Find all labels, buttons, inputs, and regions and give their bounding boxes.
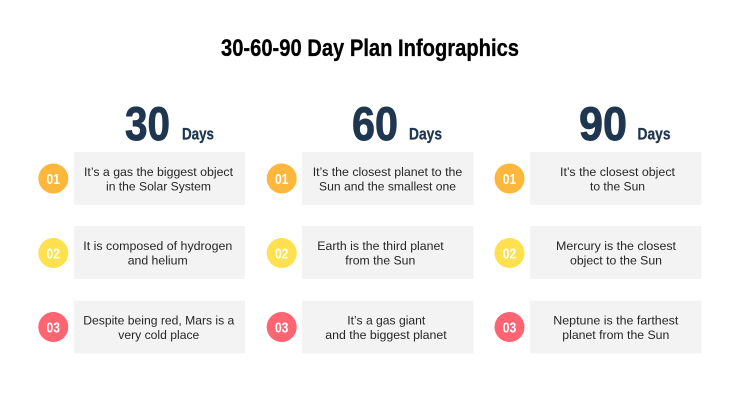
item 02: Earth is the third planet <box>317 239 444 253</box>
item 01 <box>267 152 474 205</box>
heading: 60 Days: Days <box>409 124 442 144</box>
item 02: object to the Sun <box>570 254 662 268</box>
heading: 60 Days: 60 <box>352 98 398 151</box>
item 01 <box>494 152 702 205</box>
heading: 30 Days <box>125 98 214 151</box>
item 03: 03 <box>47 320 60 336</box>
item 02: Mercury is the closest <box>556 239 677 253</box>
item 03: planet from the Sun <box>562 328 669 342</box>
column: 90 days <box>494 98 702 354</box>
column: 60 days <box>267 98 474 354</box>
item 02: 02 <box>503 246 516 262</box>
heading: 30 Days: 30 <box>125 98 170 151</box>
item 03: 03 <box>275 320 288 336</box>
item 02: and helium <box>128 254 188 268</box>
item 03: very cold place <box>118 328 199 342</box>
heading: 90 Days <box>579 98 670 151</box>
item 01: It’s the closest planet to the <box>313 165 462 179</box>
heading: 90 Days: 90 <box>579 98 627 151</box>
item 01: 01 <box>275 172 288 188</box>
item 02 <box>267 226 474 279</box>
item 03: 03 <box>503 320 516 336</box>
item 01: It’s a gas the biggest object <box>84 165 234 179</box>
item 01: Sun and the smallest one <box>319 180 456 194</box>
item 01: It’s the closest object <box>560 165 676 179</box>
item 02: It is composed of hydrogen <box>83 239 232 253</box>
item 01: 01 <box>47 172 60 188</box>
item 02 <box>38 226 245 279</box>
item 02: 02 <box>47 246 60 262</box>
item 03: Despite being red, Mars is a <box>83 314 234 328</box>
item 03: It’s a gas giant <box>347 314 426 328</box>
item 03: and the biggest planet <box>325 328 447 342</box>
title: 30-60-90 Day Plan Infographics <box>221 35 519 62</box>
heading: 30 Days: Days <box>182 124 214 144</box>
item 01: to the Sun <box>590 180 645 194</box>
item 02: 02 <box>275 246 288 262</box>
item 02 <box>494 226 702 279</box>
item 01 <box>38 152 245 205</box>
heading: 90 Days: Days <box>638 124 670 144</box>
item 03 <box>38 300 245 354</box>
heading: 60 Days <box>352 98 442 151</box>
item 03 <box>267 300 474 354</box>
item 02: from the Sun <box>345 254 415 268</box>
item 01: in the Solar System <box>106 180 211 194</box>
column: 30 days <box>38 98 245 354</box>
item 01: 01 <box>503 172 516 188</box>
item 03: Neptune is the farthest <box>553 314 679 328</box>
item 03 <box>494 300 702 354</box>
